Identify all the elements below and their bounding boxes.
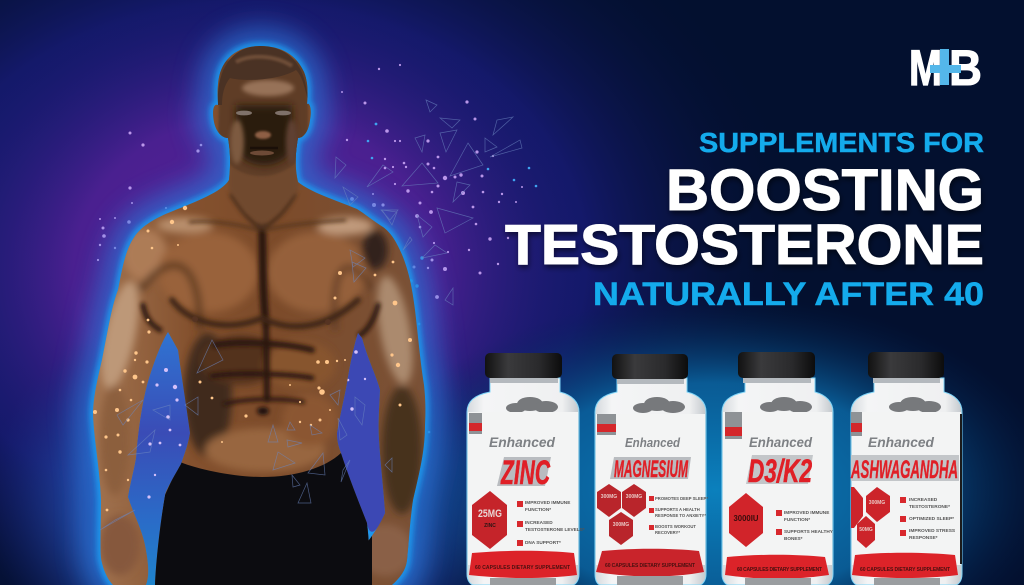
bottle: ashwagandha (850, 352, 962, 585)
bottle: ashwagandha: 300MG (869, 500, 885, 506)
bottle: zinc: FUNCTION* (525, 507, 551, 512)
bottle: magnesium: MAGNESIUM (614, 456, 688, 483)
particle field: cyan dots (367, 123, 537, 433)
bottle: ashwagandha: Enhanced (868, 434, 934, 450)
logo: MHB: B (949, 40, 982, 96)
logo: MHB (909, 40, 982, 96)
bottle: d3/k2: 60 CAPSULES DIETARY SUPPLEMENT (737, 567, 822, 573)
bottle: d3/k2: Enhanced (749, 434, 812, 450)
bottle: zinc (467, 353, 585, 585)
bottle: ashwagandha: TESTOSTERONE* (909, 504, 950, 510)
gap between left arm and torso (128, 332, 190, 585)
particle field: triangle outlines (100, 100, 522, 530)
bottle: magnesium: 300MG (626, 494, 642, 500)
title line: boosting: BOOSTING (666, 158, 984, 223)
bottle: d3/k2: BONES* (784, 536, 803, 541)
bottle: zinc: DNA SUPPORT* (525, 540, 561, 545)
shorts (150, 453, 372, 585)
bottle: zinc: INCREASED (525, 520, 553, 525)
bottle: zinc: ZINC (500, 454, 550, 492)
neck and head (218, 46, 308, 226)
logo plus (930, 49, 961, 85)
bottle: zinc: IMPROVED IMMUNE (525, 500, 570, 505)
bottle: ashwagandha: IMPROVED STRESS (909, 528, 956, 534)
bottle: magnesium: BOOSTS WORKOUT (655, 524, 696, 529)
bottle: ashwagandha: INCREASED (909, 497, 938, 503)
bottle: magnesium: PROMOTES DEEP SLEEP* (655, 496, 708, 501)
bottle: d3/k2: SUPPORTS HEALTHY (784, 529, 834, 534)
bottle: magnesium: 300MG (613, 522, 629, 528)
logo: MHB: M (909, 40, 942, 96)
bottle: d3/k2: IMPROVED IMMUNE (784, 510, 829, 515)
gap between right arm and torso (337, 333, 385, 532)
particle field: star dots (97, 64, 523, 299)
abs and chest lines (143, 195, 378, 415)
bottle: d3/k2 (722, 352, 834, 585)
bottle: magnesium: 300MG (601, 494, 617, 500)
title line: naturally after 40: NATURALLY AFTER 40 (593, 276, 984, 312)
bottle: zinc: 60 CAPSULES DIETARY SUPPLEMENT (475, 565, 570, 571)
nipples (192, 316, 331, 325)
bottle: magnesium: 60 CAPSULES DIETARY SUPPLEMENT (605, 563, 695, 569)
bottle: magnesium (595, 354, 708, 585)
muscle shading (94, 217, 422, 576)
bottle: zinc: Enhanced (489, 434, 555, 450)
title line: testosterone: TESTOSTERONE (505, 213, 984, 277)
bottle: ashwagandha: OPTIMIZED SLEEP* (909, 516, 954, 522)
bottle: magnesium: RECOVERY* (655, 530, 680, 535)
bottle: zinc: 25MG (478, 508, 502, 520)
man body (85, 40, 435, 585)
orange sparkle dots on body (93, 206, 412, 511)
bottle: d3/k2: D3/K2 (748, 453, 812, 489)
bottle: d3/k2: FUNCTION* (784, 517, 810, 522)
man figure (85, 40, 435, 585)
bottle: ashwagandha: 60 CAPSULES DIETARY SUPPLEMENT (860, 567, 950, 573)
title (505, 127, 984, 312)
man outer glow (93, 46, 425, 585)
bottle: magnesium: RESPONSE TO ANXIETY* (655, 513, 706, 518)
bottle: magnesium: SUPPORTS A HEALTH (655, 507, 700, 512)
bottle: d3/k2: 3000IU (734, 513, 758, 523)
bottle: zinc: ZINC (484, 523, 496, 529)
bottle: magnesium: Enhanced (625, 435, 681, 450)
bottle: ashwagandha: 50MG (859, 527, 873, 533)
gap sparkle dots (147, 350, 366, 499)
title line: supplements for: SUPPLEMENTS FOR (699, 127, 984, 158)
bottle: zinc: TESTOSTERONE LEVELS* (525, 527, 585, 532)
bottle: ashwagandha: RESPONSE* (909, 535, 938, 541)
